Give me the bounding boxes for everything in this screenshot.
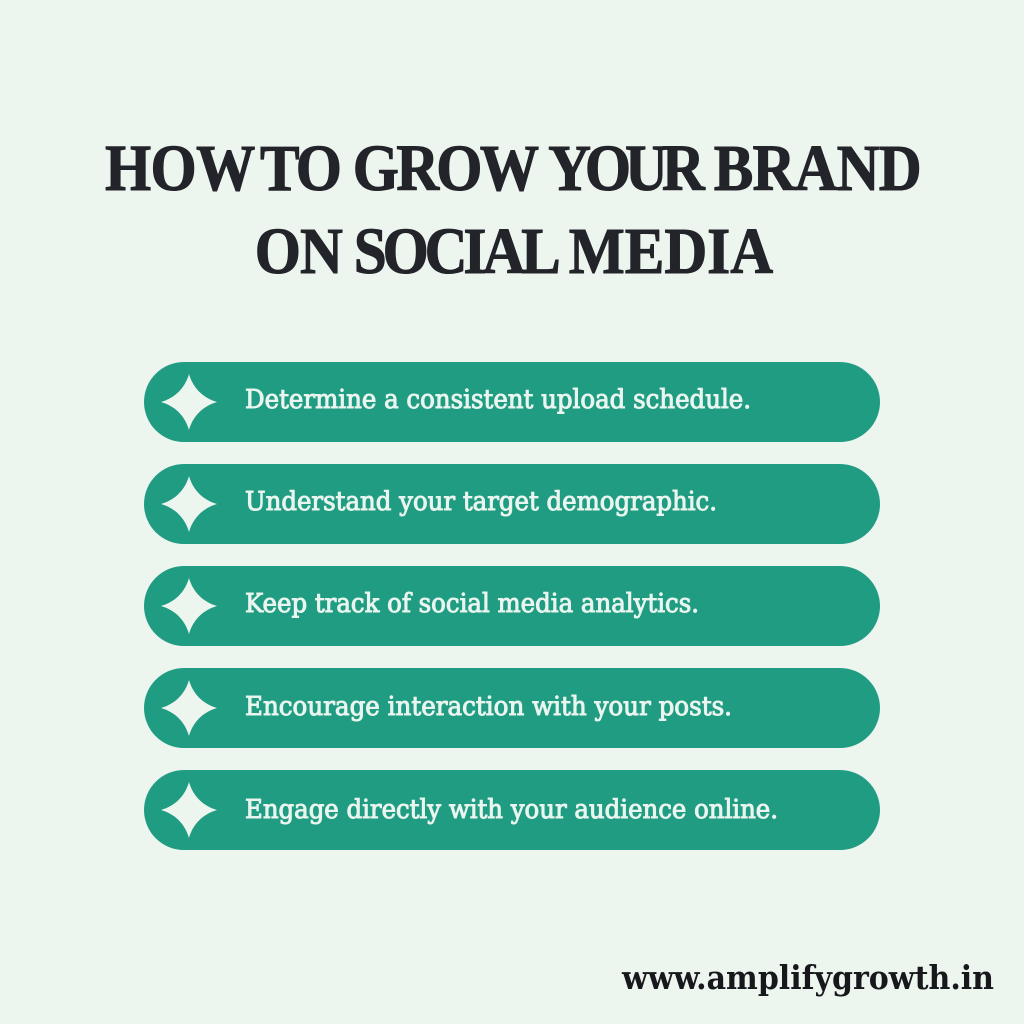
item: target demographic bbox=[144, 464, 880, 544]
item: interaction bbox=[144, 668, 880, 748]
website url: www.amplifygrowth.in bbox=[621, 958, 994, 997]
icon: sparkle star bbox=[161, 680, 217, 736]
icon: sparkle star bbox=[161, 578, 217, 634]
title: YOUR bbox=[548, 131, 705, 205]
title: SOCIAL bbox=[354, 214, 561, 288]
item: audience bbox=[144, 770, 880, 850]
item: analytics bbox=[144, 566, 880, 646]
title: TO bbox=[260, 131, 342, 205]
text: analytics: Keep track of social media analytics. bbox=[245, 589, 699, 619]
text: target demographic: Understand your target demographic. bbox=[245, 487, 717, 517]
item: upload schedule bbox=[144, 362, 880, 442]
title: BRAND bbox=[714, 131, 922, 205]
icon: sparkle star bbox=[161, 476, 217, 532]
text: upload schedule: Determine a consistent upload schedule. bbox=[245, 385, 751, 415]
text: audience: Engage directly with your audience online. bbox=[245, 795, 778, 825]
title: GROW bbox=[353, 131, 539, 205]
icon: sparkle star bbox=[161, 782, 217, 838]
icon: sparkle star bbox=[161, 374, 217, 430]
title: ON bbox=[255, 214, 343, 288]
text: interaction: Encourage interaction with your posts. bbox=[245, 692, 732, 722]
title bbox=[105, 131, 922, 288]
title: MEDIA bbox=[569, 214, 773, 288]
title: HOW bbox=[105, 131, 255, 205]
